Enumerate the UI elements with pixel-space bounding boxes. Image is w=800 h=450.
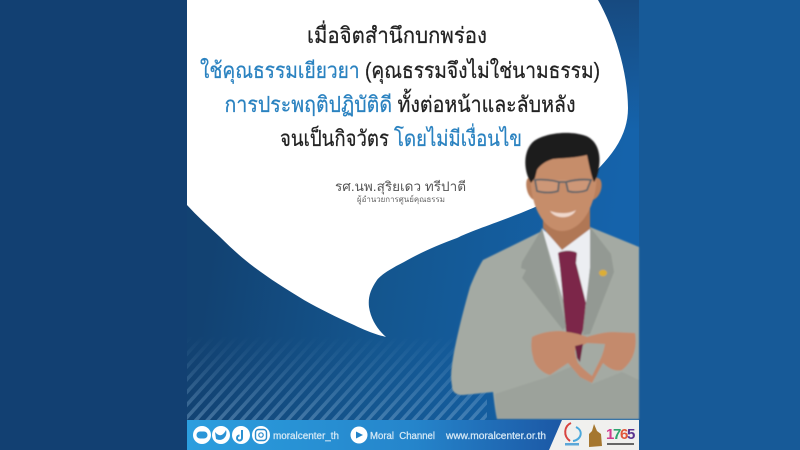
panel top-right shade: [590, 0, 639, 130]
website: www.moralcenter.or.th: [445, 431, 546, 442]
hands forming a heart: [531, 331, 636, 383]
face: [530, 150, 597, 231]
necktie: [558, 251, 586, 354]
diagonal stripes: [187, 351, 487, 420]
digit 1: 1: [606, 426, 614, 443]
speaker title: ผู้อำนวยการศูนย์คุณธรรม: [357, 194, 445, 205]
smile: [550, 210, 576, 217]
icon: youtube: [350, 426, 368, 444]
line 2: ใช้คุณธรรมเยียวยา (คุณธรรมจึงไม่ใช่นามธรรม): [200, 58, 600, 84]
central panel: [187, 0, 639, 420]
heart gap showing jacket: [575, 343, 605, 376]
logo caption: [607, 443, 634, 445]
icon: twitter: [212, 426, 230, 444]
line 1: เมื่อจิตสำนึกบกพร่อง: [307, 20, 487, 48]
line 3: การประพฤติปฏิบัติดี ทั้งต่อหน้าและลับหลัง: [224, 89, 576, 117]
logo: moral center: [565, 423, 581, 446]
background: left block: [0, 0, 187, 450]
digit 7: 7: [613, 426, 621, 443]
social handle: moralcenter_th: [273, 431, 339, 442]
hair: [525, 133, 600, 183]
shirt: [542, 227, 590, 310]
jacket front shade: [495, 365, 639, 419]
lapel pin: [599, 270, 607, 276]
suit jacket: [451, 227, 639, 419]
quote text: [200, 20, 600, 151]
glasses: [534, 180, 592, 192]
icon: instagram: [252, 426, 270, 444]
background: right block: [639, 0, 800, 450]
speaker name: รศ.นพ.สุริยเดว ทรีปาตี: [335, 179, 466, 195]
infographic canvas: [187, 0, 800, 450]
speech bubble: [187, 0, 628, 337]
channel name: Moral Channel: [370, 431, 435, 442]
footer logo panel: [549, 420, 639, 450]
tie through heart gap: [575, 344, 583, 362]
footer bar: [187, 420, 639, 450]
icon: tiktok: [232, 426, 250, 444]
social icons: [193, 426, 270, 444]
logo: 1765: [606, 426, 635, 443]
line 4: จนเป็นกิจวัตร โดยไม่มีเงื่อนไข: [280, 123, 522, 151]
left lapel: [521, 228, 566, 330]
digit 6: 6: [620, 426, 628, 443]
right lapel: [583, 227, 614, 335]
digit 5: 5: [627, 426, 635, 443]
neck: [543, 208, 590, 250]
icon: line: [193, 426, 211, 444]
ears: [526, 178, 602, 200]
portrait of speaker: [451, 133, 639, 419]
logo: crest: [589, 424, 602, 447]
